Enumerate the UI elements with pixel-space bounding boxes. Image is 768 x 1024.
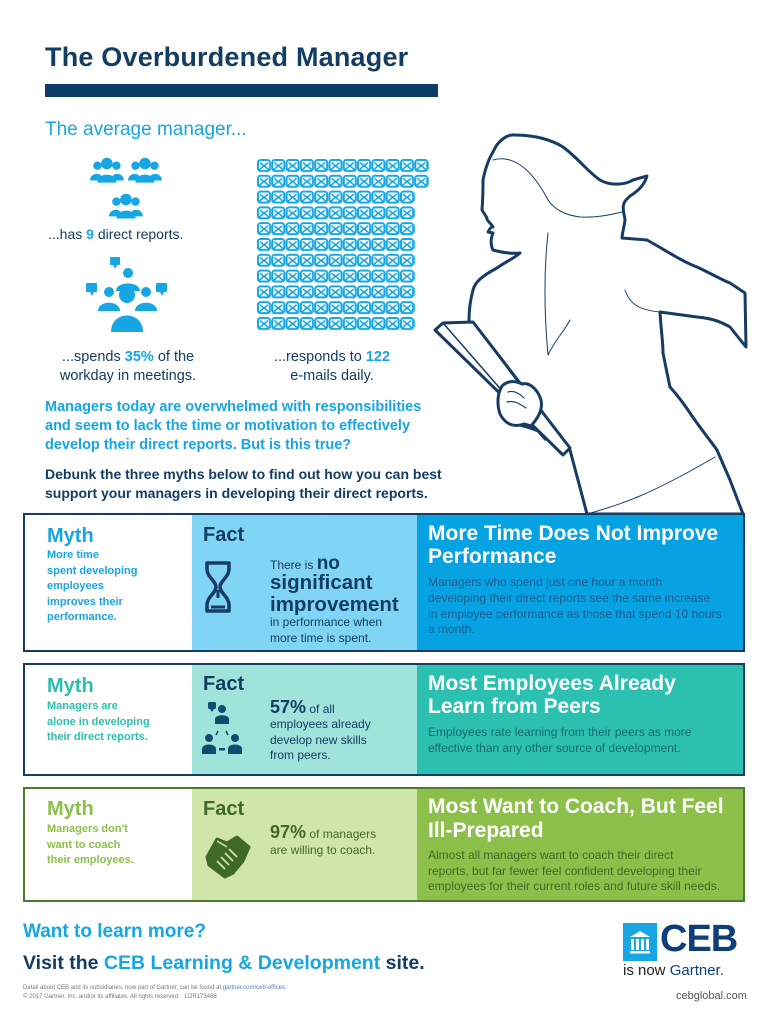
headline 1: Managers who spend just one hour a month	[428, 575, 662, 589]
stat: emails: e-mails daily.	[290, 368, 374, 384]
stat: meetings	[60, 349, 196, 384]
fact column 1: significant	[270, 571, 373, 594]
myth column 2: their direct reports.	[47, 731, 148, 743]
fact column 2: from peers.	[270, 748, 331, 762]
myth column 1: performance.	[47, 611, 117, 623]
icon: meeting	[86, 257, 167, 332]
stat: direct reports: ...has 9 direct reports.	[48, 226, 183, 242]
fact column 1: in performance when	[270, 615, 382, 629]
myth column 1	[25, 515, 192, 650]
stat: emails	[274, 349, 390, 384]
headline 3: reports, but far fewer feel confident developing their	[428, 864, 702, 878]
icon: handshake	[206, 836, 250, 878]
logo: CEB is now Gartner: CEB	[660, 918, 737, 960]
panel: myth 2	[23, 663, 745, 776]
fact column 2: 57% of all	[270, 697, 335, 717]
fact column 1: improvement	[270, 593, 399, 616]
myth column 3	[25, 789, 192, 900]
headline 3: Most Want to Coach, But Feel	[428, 795, 724, 818]
headline 1	[417, 515, 743, 650]
intro paragraph: develop their direct reports. But is this true?	[45, 437, 351, 453]
panel: myth 1	[23, 513, 745, 652]
myth column 3: want to coach	[47, 839, 120, 851]
icon: direct reports	[90, 158, 162, 218]
headline 1: in employee performance as those that spend 10 hours	[428, 607, 722, 621]
myth column 1: More time	[47, 549, 99, 561]
stat: meetings: workday in meetings.	[60, 368, 196, 384]
fact column 1: more time is spent.	[270, 630, 371, 644]
headline 2: Employees rate learning from their peers as more	[428, 725, 691, 739]
logo: CEB is now Gartner: is now Gartner.	[623, 962, 724, 979]
icon: building	[623, 923, 657, 961]
myth column 2: alone in developing	[47, 716, 150, 728]
fact column 1: Fact	[203, 524, 244, 546]
fact column 3	[192, 789, 417, 900]
myth column 2: Managers are	[47, 700, 118, 712]
headline 2	[417, 665, 743, 774]
fact column 1: There is no	[270, 553, 340, 574]
myth column 1: Myth	[47, 525, 94, 547]
myth column 3: Managers don't	[47, 823, 128, 835]
call to action text: support your managers in developing their direct reports.	[45, 485, 428, 501]
headline 2: Most Employees Already	[428, 672, 676, 695]
fine print: Detail about CEB and its subsidiaries, now part of Gartner, can be found at gartner.com/ceb-offices.	[23, 985, 287, 991]
headline 2: Learn from Peers	[428, 694, 601, 718]
fact column 2: employees already	[270, 717, 371, 731]
myth column 2: Myth	[47, 675, 94, 697]
headline 1: a month.	[428, 622, 475, 636]
title underline bar	[45, 84, 438, 97]
fact column 3: are willing to coach.	[270, 843, 375, 857]
headline 1: More Time Does Not Improve	[428, 522, 718, 545]
subtitle: The average manager...	[45, 119, 247, 140]
headline 3: Ill-Prepared	[428, 818, 544, 842]
fine print	[23, 984, 287, 1000]
fact column 2	[192, 665, 417, 774]
headline 3	[417, 789, 743, 900]
icon: hourglass	[205, 561, 231, 613]
headline 1: developing their direct reports see the same increase	[428, 591, 710, 605]
headline 3: employees for their current roles and future skill needs.	[428, 879, 720, 893]
illustration: woman with book	[433, 133, 748, 513]
myth column 2	[25, 665, 192, 774]
fact column 3: 97% of managers	[270, 822, 376, 842]
myth column 3: their employees.	[47, 854, 134, 866]
stat: meetings: ...spends 35% of the	[62, 349, 194, 365]
fact column 3: Fact	[203, 798, 244, 820]
myth column 1: spent developing	[47, 565, 137, 577]
intro paragraph: and seem to lack the time or motivation to effectively	[45, 418, 410, 434]
panel: myth 3	[23, 787, 745, 902]
title: The Overburdened Manager	[45, 42, 408, 72]
headline 1: Performance	[428, 544, 556, 568]
call to action text: Debunk the three myths below to find out how you can best	[45, 466, 442, 482]
headline 3: Almost all managers want to coach their direct	[428, 848, 673, 862]
fact column 2: develop new skills	[270, 733, 367, 747]
intro paragraph	[45, 399, 421, 453]
intro paragraph: Managers today are overwhelmed with responsibilities	[45, 399, 421, 415]
logo: CEB is now Gartner	[623, 918, 737, 979]
myth column 3: Myth	[47, 798, 94, 820]
myth column 1: improves their	[47, 596, 123, 608]
footer: visit site: Visit the CEB Learning & Development site.	[23, 952, 425, 974]
headline 2: effective than any other source of development.	[428, 741, 681, 755]
footer: learn more: Want to learn more?	[23, 921, 206, 942]
icon: peers	[202, 702, 242, 754]
call to action text	[45, 466, 442, 501]
icon grid: emails	[257, 159, 429, 330]
fine print: © 2017 Gartner, Inc. and/or its affiliates. All rights reserved. LDR173488	[23, 994, 217, 1000]
fact column 1	[192, 515, 417, 650]
fact column 2: Fact	[203, 673, 244, 695]
stat: emails: ...responds to 122	[274, 349, 390, 365]
myth column 1: employees	[47, 580, 104, 592]
website: cebglobal.com	[676, 990, 747, 1002]
